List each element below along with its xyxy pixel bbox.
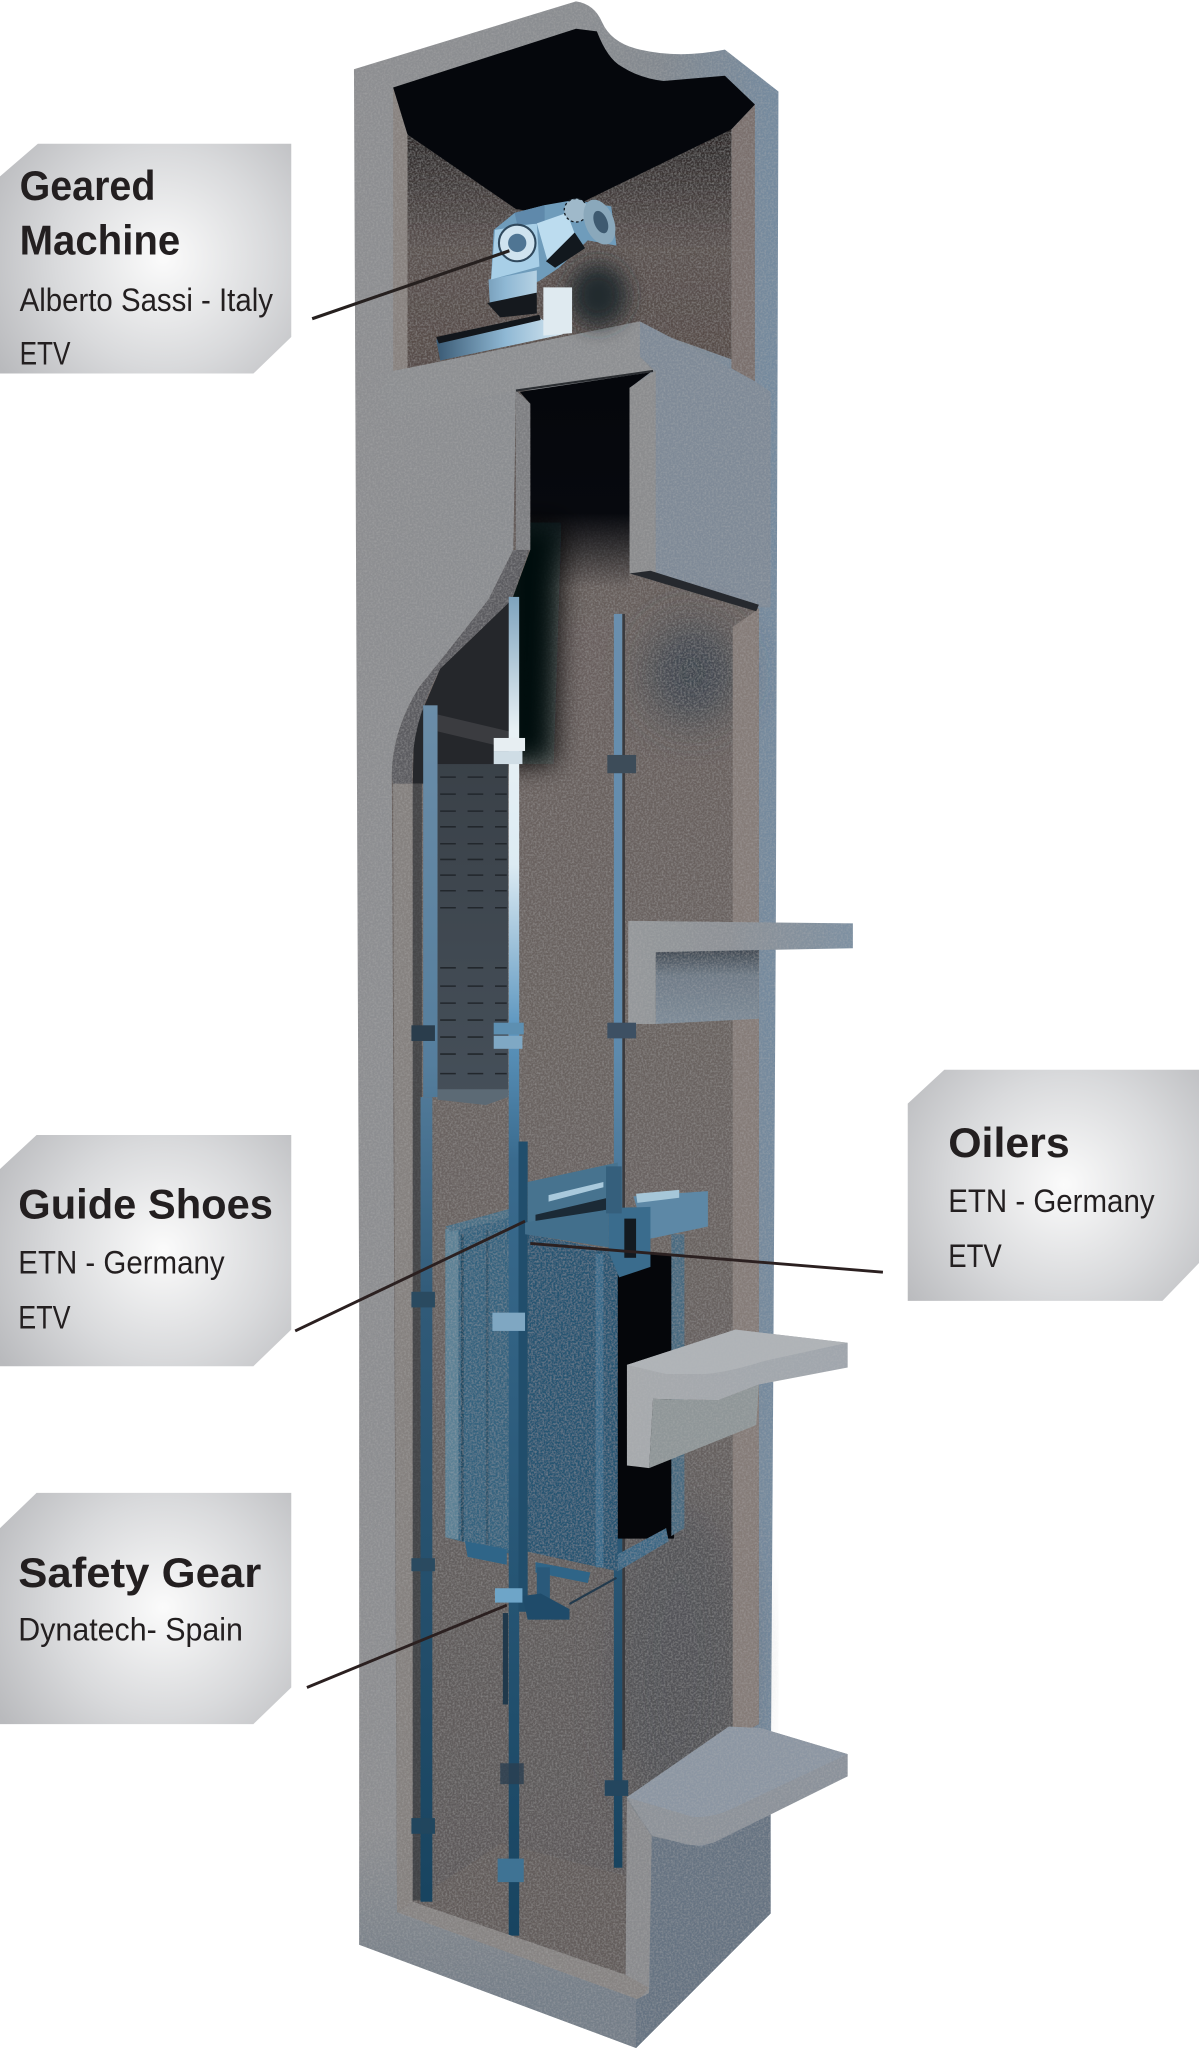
guide rail left bbox=[413, 705, 438, 1902]
machine room back wall bbox=[408, 118, 731, 368]
heading: safety gear: Safety Gear bbox=[18, 1549, 261, 1596]
pit floor bbox=[413, 1843, 626, 1975]
rail brackets bbox=[411, 738, 636, 1882]
landing C slab bbox=[627, 1727, 848, 1845]
leader line: oilers bbox=[530, 1243, 883, 1272]
pit floor lip bbox=[397, 1902, 649, 2000]
car bottom safety plates bbox=[465, 1541, 616, 1620]
car sill bbox=[618, 1528, 669, 1571]
supplier text: Alberto Sassi - Italy bbox=[20, 281, 274, 318]
panel: geared machine bbox=[0, 144, 291, 374]
gearbox body bbox=[491, 223, 539, 280]
machine silhouette bbox=[490, 200, 616, 303]
guide rail right bbox=[614, 614, 625, 1868]
heading: geared machine: Geared bbox=[20, 162, 155, 209]
landing C top face bbox=[627, 1727, 848, 1817]
wall below landing C bbox=[636, 1813, 771, 2048]
machine room left reveal bbox=[393, 88, 408, 371]
landing B top face bbox=[627, 1330, 848, 1374]
shaft neck left reveal bbox=[516, 391, 530, 550]
lower wall tint bbox=[359, 1829, 771, 2048]
panel: safety gear bbox=[0, 1493, 291, 1724]
car seam bbox=[486, 1230, 488, 1550]
supplier text: Dynatech- Spain bbox=[18, 1610, 243, 1647]
landing A recess bbox=[656, 950, 759, 1024]
shaft top darkness bbox=[520, 372, 650, 614]
car left pillar bbox=[445, 1228, 458, 1540]
car right panel bbox=[528, 1234, 618, 1571]
landing A slab bbox=[628, 921, 853, 1024]
car right highlight bbox=[596, 1254, 603, 1567]
machine upright bbox=[543, 287, 572, 336]
leader line: guide shoes bbox=[295, 1221, 525, 1331]
supplier text: ETN - Germany bbox=[948, 1182, 1155, 1219]
drive gear bbox=[564, 199, 588, 222]
guide rail centre bbox=[503, 597, 528, 1936]
outer wall silhouette bbox=[354, 1, 778, 2048]
slab underside line bbox=[516, 371, 653, 391]
lower shaft shadow bbox=[614, 1502, 744, 1815]
machine shadow bbox=[569, 264, 627, 327]
concrete reveals bbox=[392, 371, 853, 1912]
counterweight bbox=[438, 714, 509, 1105]
machine room floor slab bbox=[379, 321, 653, 415]
landing B lower face bbox=[649, 1384, 759, 1468]
machine lower frame bbox=[488, 270, 537, 303]
car top crosshead bbox=[525, 1162, 708, 1277]
concrete shaft structure bbox=[354, 1, 778, 2048]
shaft right reveal bbox=[733, 609, 759, 1737]
gearbox housing bbox=[537, 213, 577, 260]
panel: guide shoes bbox=[0, 1135, 291, 1366]
geared machine bbox=[436, 195, 627, 361]
supplier text: ETN - Germany bbox=[18, 1243, 225, 1280]
base dark edge bbox=[436, 315, 541, 344]
upper right wall shadow bbox=[648, 623, 737, 722]
heading line two: Machine bbox=[20, 217, 180, 264]
shaft opening back wall bbox=[392, 388, 759, 1975]
motor flange bbox=[577, 195, 622, 249]
machine base bbox=[436, 317, 563, 361]
car door frame bbox=[671, 1234, 684, 1536]
sheave wheel bbox=[499, 225, 536, 261]
gearbox top bbox=[515, 205, 545, 225]
machine frame gap bbox=[487, 293, 537, 317]
supplier text 2: ETV bbox=[18, 1298, 71, 1335]
elevator car bbox=[445, 1208, 684, 1571]
block underside bbox=[630, 571, 759, 611]
block left reveal bbox=[630, 371, 656, 581]
panel: oilers bbox=[908, 1070, 1199, 1301]
car door opening bbox=[616, 1254, 674, 1539]
landing B slab bbox=[627, 1330, 848, 1468]
shaft left reveal bbox=[393, 784, 413, 1912]
shaft left reveal upper bbox=[392, 550, 529, 810]
machine room right reveal bbox=[731, 105, 755, 381]
leader line: geared machine bbox=[312, 251, 509, 319]
car left panel bbox=[445, 1215, 512, 1554]
heading: guide shoes: Guide Shoes bbox=[18, 1181, 273, 1228]
shadowed coupling bbox=[546, 233, 585, 268]
machine room ceiling bbox=[393, 29, 755, 216]
car top edge bbox=[445, 1208, 512, 1232]
landing slabs over car bbox=[397, 1330, 848, 2048]
supplier text 2: ETV bbox=[20, 334, 71, 371]
heading: oilers: Oilers bbox=[948, 1119, 1070, 1166]
recess shadow alcove bbox=[413, 600, 512, 784]
shaft side shadow bbox=[496, 522, 562, 764]
car left seam bbox=[461, 1234, 464, 1541]
leader line: safety gear bbox=[307, 1605, 507, 1687]
slab right block face bbox=[640, 321, 771, 607]
supplier text 2: ETV bbox=[948, 1237, 1002, 1274]
pit right pier bbox=[626, 1800, 652, 2000]
